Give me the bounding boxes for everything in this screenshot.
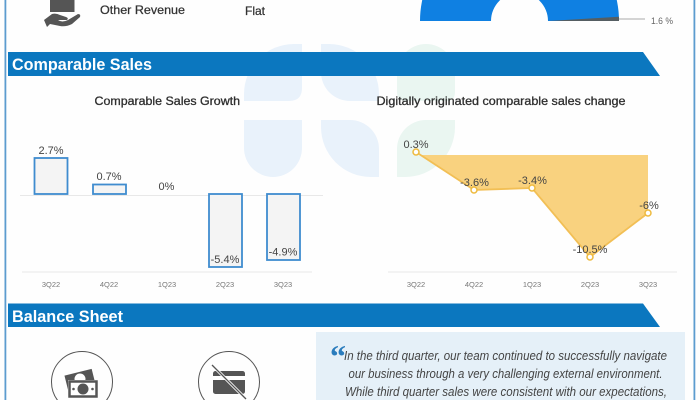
label: other revenue: Other Revenue — [100, 3, 185, 17]
heading: balance sheet — [8, 304, 660, 327]
donut slice 1.6 percent — [548, 17, 619, 21]
area chart: digitally originated sales: -10.5% — [573, 244, 608, 256]
area chart: digitally originated sales: 3Q23 — [639, 280, 657, 289]
area chart: digitally originated sales — [388, 139, 677, 289]
watermark logo — [244, 44, 455, 177]
donut chart — [420, 0, 673, 27]
heading: balance sheet: Balance Sheet — [12, 307, 123, 326]
bar chart: comparable sales growth: 0% — [159, 181, 175, 193]
bar chart: comparable sales growth: -4.9% — [269, 246, 298, 258]
area chart: digitally originated sales: -3.4% — [518, 175, 547, 187]
icon: cash — [52, 352, 112, 400]
bar chart: comparable sales growth: 1Q23 — [158, 280, 176, 289]
chart title: digitally originated: Digitally originated comparable sales change — [376, 94, 626, 108]
area chart: digitally originated sales: -6% — [639, 200, 659, 212]
area chart: digitally originated sales: 0.3% — [403, 139, 429, 151]
area chart: digitally originated sales: 2Q23 — [581, 280, 599, 289]
donut label: 1.6 % — [651, 16, 673, 27]
value: flat: Flat — [245, 4, 266, 18]
icon: hand holding box — [44, 0, 80, 27]
bar chart: comparable sales growth: 3Q22 — [42, 280, 60, 289]
bar chart: comparable sales growth: 4Q22 — [100, 280, 118, 289]
bar chart: comparable sales growth: -5.4% — [211, 254, 240, 266]
quote text: our business through a very challenging external environment. — [348, 367, 662, 381]
quote text — [344, 349, 667, 399]
area chart: digitally originated sales: -3.6% — [460, 177, 489, 189]
chart title: comparable sales growth: Comparable Sales Growth — [94, 94, 240, 108]
bar chart: comparable sales growth: 3Q23 — [274, 280, 292, 289]
quote text: While third quarter sales were consistent with our expectations, — [345, 385, 667, 399]
heading: comparable sales — [8, 52, 660, 76]
area chart: digitally originated sales: 3Q22 — [407, 280, 425, 289]
bar chart: comparable sales growth: 2Q23 — [216, 280, 234, 289]
heading: comparable sales: Comparable Sales — [12, 55, 152, 74]
quote text: In the third quarter, our team continued to successfully navigate — [344, 349, 667, 363]
bar chart: comparable sales growth — [20, 145, 323, 289]
bar chart: comparable sales growth: 0.7% — [96, 171, 122, 183]
quote panel — [316, 332, 685, 400]
icon: no credit card — [198, 352, 260, 400]
area chart: digitally originated sales: 4Q22 — [465, 280, 483, 289]
other revenue row — [44, 0, 266, 27]
quote mark: “ — [330, 338, 346, 374]
area chart: digitally originated sales: 1Q23 — [523, 280, 541, 289]
bar chart: comparable sales growth: 2.7% — [38, 145, 64, 157]
